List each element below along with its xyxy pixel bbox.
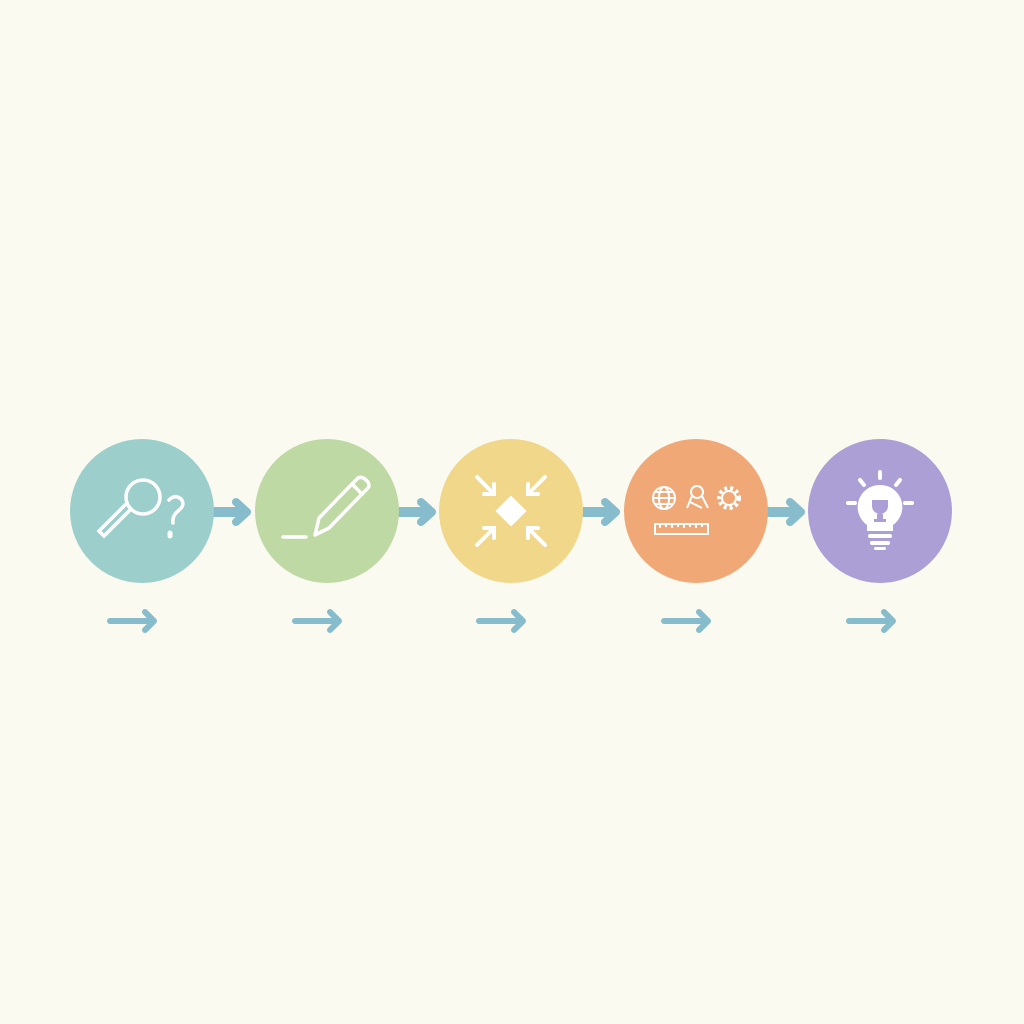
bottom arrows (110, 612, 893, 630)
icon: lightbulb with trophy (848, 472, 912, 550)
icon: pencil (283, 477, 369, 537)
connector arrow 4 (766, 502, 801, 522)
connector arrow 2 (397, 502, 432, 522)
step 3: focus circle (439, 439, 583, 583)
icon: globe, network, gear, ruler (653, 486, 739, 534)
connector arrow 3 (581, 502, 616, 522)
connector arrow 1 (212, 502, 247, 522)
step 1: research circle (70, 439, 214, 583)
step 4: tools circle (624, 439, 768, 583)
step 2: writing circle (255, 439, 399, 583)
step 5: idea circle (808, 439, 952, 583)
icon: converging arrows with diamond (477, 477, 545, 545)
icon: magnifier with question mark (99, 480, 183, 536)
